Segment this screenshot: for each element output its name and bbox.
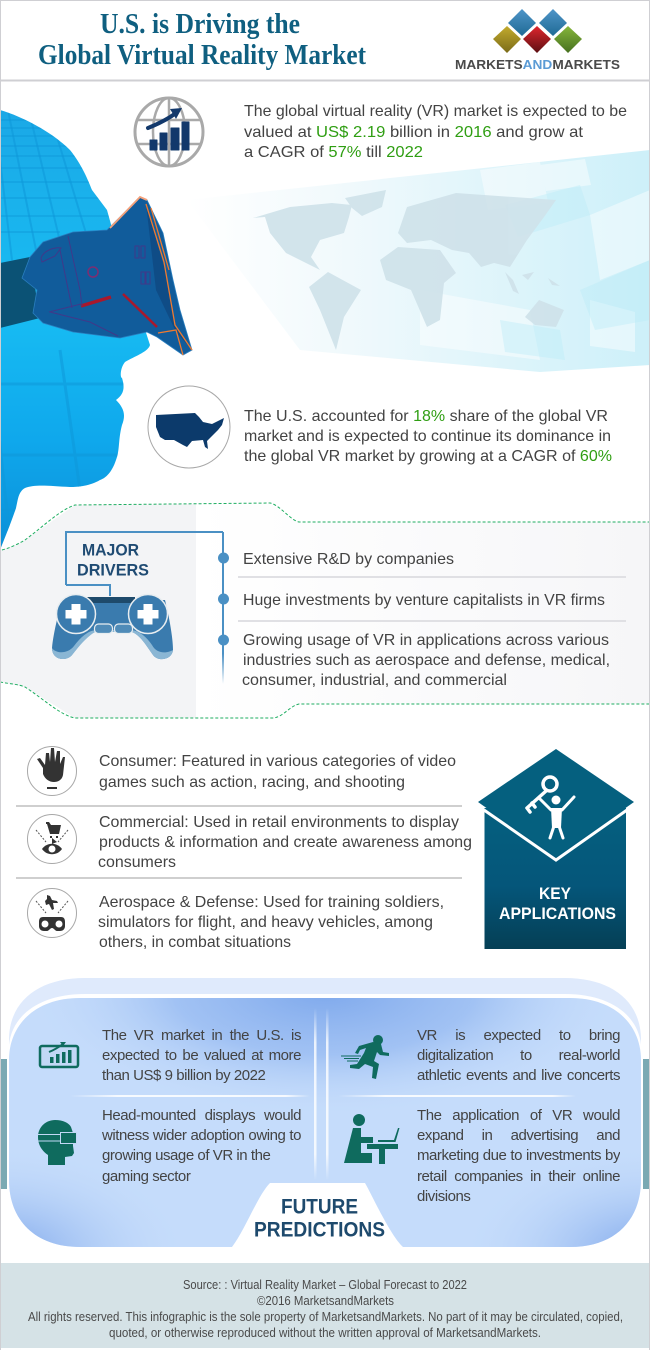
application: commercial <box>98 814 472 871</box>
prediction: head-mounted displays: witness wider adoption owing to <box>102 1127 301 1144</box>
logo: MarketsandMarkets <box>455 9 620 72</box>
application: commercial: consumers <box>98 854 176 871</box>
prediction: athletic events: VR is expected to bring <box>417 1027 620 1044</box>
prediction: U.S. market value: expected to be valued at more <box>102 1047 301 1064</box>
key applications list <box>16 746 472 951</box>
text: U.S. share statement: The U.S. accounted for 18% share of the global VR <box>244 408 608 425</box>
application: commercial: products & information and create awareness among <box>99 834 472 851</box>
panel: major drivers <box>0 503 650 718</box>
driver 3: Growing usage of VR in applications across various <box>243 632 609 649</box>
text: U.S. share statement: the global VR market by growing at a CAGR of 60% <box>244 448 612 465</box>
prediction: athletic events <box>417 1026 620 1090</box>
icon: runner <box>341 1035 389 1079</box>
icon: hand <box>28 746 76 796</box>
title <box>38 8 366 71</box>
VR headset <box>0 197 192 355</box>
application: aerospace and defense: others, in combat situations <box>99 934 291 951</box>
future predictions label: PREDICTIONS <box>254 1218 385 1242</box>
prediction: advertising and marketing: divisions <box>417 1188 470 1205</box>
future predictions label: FUTURE <box>281 1194 358 1218</box>
text: U.S. share statement: market and is expected to continue its dominance in <box>244 428 611 445</box>
driver 2: Huge investments by venture capitalists in VR firms <box>243 592 605 609</box>
driver 3: industries such as aerospace and defense, medical, <box>243 652 610 669</box>
prediction: advertising and marketing: retail companies in their online <box>417 1168 620 1185</box>
icon: plane and goggles <box>28 888 76 938</box>
prediction: athletic events: digitalization to real-world <box>417 1047 620 1064</box>
application: consumer: Consumer: Featured in various categories of video <box>99 753 456 770</box>
driver 3 <box>242 632 610 689</box>
icon: person at desk <box>344 1114 400 1164</box>
text: global market statement: valued at US$ 2.19 billion in 2016 and grow at <box>244 124 584 141</box>
footer: ©2016 MarketsandMarkets <box>257 1294 394 1308</box>
application: commercial: Commercial: Used in retail environments to display <box>99 814 459 831</box>
text: global market statement: The global virtual reality (VR) market is expected to be <box>244 103 627 120</box>
major drivers heading: MAJOR <box>82 542 139 560</box>
icon: person holding key <box>527 777 574 838</box>
logo: MarketsandMarkets: MARKETS ANDMARKETS <box>455 57 620 72</box>
text: U.S. share statement <box>244 408 612 465</box>
prediction: head-mounted displays: Head-mounted displays would <box>102 1107 301 1124</box>
application: consumer: games such as action, racing, and shooting <box>99 774 405 791</box>
application: aerospace and defense: simulators for flight, and heavy vehicles, among <box>98 914 433 931</box>
footer: Source: : Virtual Reality Market – Global Forecast to 2022 <box>183 1278 467 1292</box>
key applications label: KEY <box>539 884 572 903</box>
icon: tablet chart <box>40 1042 78 1067</box>
future predictions label <box>232 1183 403 1247</box>
prediction: head-mounted displays: gaming sector <box>102 1168 190 1185</box>
prediction: advertising and marketing <box>417 1106 620 1212</box>
header divider <box>0 80 650 82</box>
driver 3: consumer, industrial, and commercial <box>242 672 507 689</box>
title: Global Virtual Reality Market <box>38 39 366 71</box>
icon: cart and eye <box>28 814 76 864</box>
text: global market statement <box>244 103 627 161</box>
footer <box>0 1263 650 1348</box>
prediction: advertising and marketing: marketing due to investments by <box>417 1147 620 1164</box>
globe growth icon <box>135 98 203 166</box>
VR user head silhouette <box>0 110 150 550</box>
panel: future predictions <box>9 978 641 1247</box>
prediction: head-mounted displays <box>102 1106 301 1192</box>
world map <box>253 190 564 350</box>
prediction: U.S. market value <box>102 1026 301 1090</box>
major drivers timeline <box>218 532 229 684</box>
side accents <box>0 1059 650 1189</box>
prediction: U.S. market value: The VR market in the U.S. is <box>102 1027 301 1044</box>
footer: quoted, or otherwise reproduced without the written approval of MarketsandMarkets. <box>109 1326 541 1340</box>
key applications label: APPLICATIONS <box>499 904 616 923</box>
key applications label <box>499 884 616 923</box>
text: global market statement: a CAGR of 57% till 2022 <box>244 144 423 161</box>
prediction: advertising and marketing: expand in advertising and <box>417 1127 620 1144</box>
prediction: athletic events: athletic events and live concerts <box>417 1067 620 1084</box>
application: consumer <box>99 753 456 791</box>
application: aerospace and defense <box>98 894 444 951</box>
icon: head with HMD <box>38 1120 76 1165</box>
major drivers bracket <box>66 532 223 596</box>
driver 1: Extensive R&D by companies <box>243 551 454 568</box>
icon: game controller <box>52 594 173 659</box>
U.S. map icon <box>148 386 230 468</box>
application: aerospace and defense: Aerospace & Defense: Used for training soldiers, <box>99 894 444 911</box>
prediction: head-mounted displays: growing usage of VR in the <box>102 1147 270 1164</box>
major drivers heading <box>77 542 149 580</box>
world map background band <box>187 150 650 372</box>
title: U.S. is Driving the <box>100 8 300 40</box>
prediction: advertising and marketing: The application of VR would <box>417 1107 620 1124</box>
prediction: U.S. market value: than US$ 9 billion by 2022 <box>102 1067 265 1084</box>
major drivers heading: DRIVERS <box>77 562 149 580</box>
panel: key applications <box>478 749 634 949</box>
